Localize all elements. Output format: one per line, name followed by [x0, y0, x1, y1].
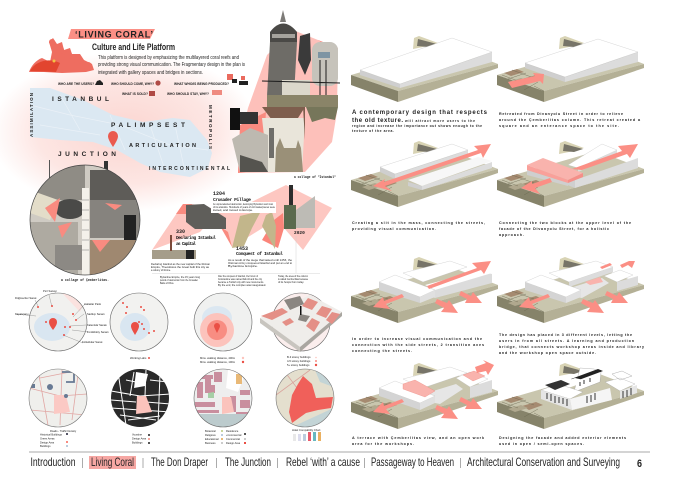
site map 5: traffic density [29, 369, 87, 427]
legend: figure ground: Voustine [132, 432, 143, 436]
text: diagram 5: In order to increase visual communication and the [352, 337, 482, 341]
timeline text: 330: Empire, Theodosius the Great built this city as [151, 266, 210, 269]
timeline notes: By the end, the complex was inaugurated. [218, 284, 266, 287]
text: diagram 1: region and increase the importance out shows enough to the [352, 124, 482, 128]
legend: land use: Residence [226, 429, 239, 433]
pink bridge block [527, 158, 583, 183]
arrow: axis [572, 144, 638, 170]
legend: traffic density: Historical Buildings [40, 432, 63, 436]
text: diagram 3 [352, 221, 485, 231]
site map 1: street labels: Koltuklular Sanat [82, 340, 103, 344]
legend: walking distance: Mins. walking distance, 100m [200, 360, 236, 364]
legend: color bars [292, 428, 321, 441]
text: diagram 1 [352, 110, 488, 133]
intro paragraph [98, 55, 245, 76]
diagram 4: connected blocks [497, 141, 644, 207]
text: diagram 8 [499, 436, 626, 446]
diagram 2: retreat [497, 36, 644, 102]
footer navigation: Rebel ‘with’ a cause [286, 455, 360, 469]
Galata tower [267, 10, 297, 96]
timeline text: 1204: Crusader Pillage [213, 197, 251, 203]
timeline notes: became a Turkish city with new monuments. [218, 281, 264, 284]
text: diagram 4: Connecting the two blocks at the upper level of the [499, 221, 631, 225]
text: diagram 2: around the Çemberlitas column. This retreat created a [499, 118, 641, 122]
legend: land use: Educational [205, 437, 219, 441]
arrow: street [521, 178, 552, 194]
text: diagram 6: users in from all streets. A learning and production [499, 339, 635, 343]
site map 1: street labels: Kalemkâr Sanatı [87, 323, 107, 327]
footer navigation: Passageway to Heaven [371, 455, 454, 469]
timeline photo: 330 [152, 235, 196, 259]
arrow: slit [373, 144, 491, 191]
site map 3: walking distance [194, 293, 252, 351]
text: diagram 2 [499, 112, 641, 128]
question row with icons: WHAT WHO/IS BEING PRODUCED? [174, 82, 229, 86]
map keywords: PALIMPSEST [111, 122, 185, 129]
map keywords [29, 93, 230, 172]
intro paragraph: This platform is designed by emphasizing the multilayered coral reefs and [98, 55, 239, 61]
timeline notes: After the conquest of Istanbul, the Forum of [218, 275, 258, 278]
text: diagram 6: bridge, that connects workshop areas inside and library [499, 345, 645, 349]
legend: building heights: 5+ storey buildings [287, 363, 310, 367]
legend: walking distance: Mins. walking distance, 400m [200, 356, 236, 360]
question row with icons: WHO SHOULD STAY, WHY? [167, 92, 209, 96]
text: diagram 6 [499, 333, 645, 355]
text: diagram 8: used in open / semi-open spaces. [499, 442, 584, 446]
legend: land use: +Commercial [226, 433, 242, 437]
timeline text: 330: as Capital [176, 241, 196, 247]
legend: working labs: Working Labs [130, 356, 147, 360]
timeline text: 1453: Ottoman Army conquered Istanbul and put an end to [228, 262, 293, 265]
diagram 3: slit [351, 141, 498, 207]
map keywords: METROPOLIS [208, 105, 213, 149]
arrow: long axis [427, 261, 491, 289]
diagram 8: final building [497, 363, 644, 429]
timeline text: 330 [151, 229, 216, 272]
timeline text: 2020: 2020 [294, 230, 305, 236]
question row with icons [58, 74, 248, 96]
question row with icons: WHAT IS SOLD? [122, 92, 148, 96]
text: diagram 7 [352, 436, 485, 446]
intro paragraph: integrated with gallery spaces and bridges in sections. [98, 70, 203, 76]
text: diagram 1: the old texture. [352, 118, 403, 124]
arrow: entrance [508, 73, 544, 88]
timeline notes: Today, the area of the column [278, 275, 309, 278]
timeline text: 1453 [228, 246, 293, 268]
text: diagram 8: Designing the facade and added exterior elements [499, 436, 626, 440]
text: diagram 4: approach. [499, 233, 524, 237]
timeline maps: 1453 [232, 211, 276, 249]
text: diagram 5 [352, 337, 484, 353]
text: diagram 1: A contemporary design that respects [352, 110, 488, 116]
text: diagram 7: area for the workshops. [352, 442, 414, 446]
text: diagram 7: A terrace with Çemberlitas view, and an open work [352, 436, 485, 440]
collage of Cemberlitas [30, 160, 140, 275]
text: diagram 5: connecting the streets. [352, 349, 412, 353]
footer navigation [30, 455, 620, 469]
timeline text: 1204: An unprecedented destruction, destroying Byzantium and most [213, 203, 273, 206]
site map 1: street labels: Düğmeciler Sanat [15, 296, 37, 300]
timeline notes: period of destruction from the Crusader [160, 279, 198, 282]
historic district map [276, 368, 334, 428]
text: diagram 3: Creating a slit in the mass, connecting the streets, [352, 221, 485, 225]
legend: building heights [287, 355, 317, 367]
legend: figure ground [132, 432, 150, 444]
timeline notes: Byzantine Empire, the 15 years long [160, 276, 201, 279]
page number: 6 [637, 458, 642, 470]
timeline text: 1204 [211, 191, 276, 213]
timeline notes: of its hoops from today. [278, 281, 304, 284]
text: diagram 6: and the workshop open space outside. [499, 351, 596, 355]
legend: color bars: Hotel Compability Chart [292, 428, 321, 432]
timeline text: 330: a colony of Rome. [151, 269, 171, 272]
arrow: bottom [435, 299, 458, 313]
legend: figure ground: Buildings [132, 440, 143, 444]
timeline text: 1453: As a result of the siege that lasted until 1453, the [228, 259, 293, 262]
legend: land use: Religious [205, 433, 216, 437]
timeline text: 1453: Conquest of Istanbul [236, 251, 283, 257]
legend: building heights: 4-5 storey buildings [287, 359, 311, 363]
text: diagram 2: square and an enterance space to the site. [499, 124, 619, 128]
legend: land use [205, 429, 246, 445]
arrow: right [459, 291, 482, 303]
legend: land use: Commercial [226, 437, 240, 441]
legend: traffic density [40, 429, 77, 448]
legend: land use: Business [205, 441, 216, 445]
legend: figure ground: Design Area [132, 436, 147, 440]
timeline photo: 1204 [186, 204, 226, 229]
background glow [0, 52, 260, 212]
timeline photo: 2020 [284, 185, 315, 229]
title: Living Coral: ‘LIVING CORAL’ [75, 30, 153, 40]
map keywords: JUNCTION [58, 151, 116, 158]
legend: traffic density: Roads - Traffic Density [50, 429, 77, 433]
collage of Istanbul [230, 10, 340, 173]
diagram 7: terrace [351, 360, 498, 429]
text: diagram 6: The design has placed in 3 different levels, letting the [499, 333, 632, 337]
legend: traffic density: Design Area [40, 440, 55, 444]
subtitle: Culture and Life Platform [92, 42, 175, 52]
arrows: terrace [373, 360, 494, 419]
footer navigation: The Junction [225, 455, 271, 469]
timeline notes: is called Cemberlitas because [278, 278, 309, 281]
footer navigation: The Don Draper [151, 455, 208, 469]
map keywords: ASSIMILATION [29, 93, 34, 137]
timeline text: 1204: looted, and moved to Europe. [213, 209, 253, 212]
timeline [151, 185, 332, 287]
site model isometric [260, 293, 342, 352]
footer navigation: Introduction [30, 455, 76, 469]
map keywords: ISTANBUL [52, 96, 109, 103]
timeline text: 330: Declaring Istanbul [176, 235, 216, 241]
timeline text: 1204: 1204 [213, 191, 225, 197]
pink terraces [403, 371, 485, 397]
timeline notes: Battle of Rhos. [160, 282, 174, 285]
legend: building heights: B-3 storey buildings [287, 355, 311, 359]
timeline text: 330: 330 [176, 229, 185, 235]
map pin [108, 131, 118, 147]
legend: working labs [130, 356, 150, 360]
text: diagram 1: will attract more users to the [404, 119, 475, 123]
text: diagram 2: Retreated from Divanyolu Street in order to relieve [499, 112, 623, 116]
caption: collage of Istanbul: a collage of "Istanbul" [294, 175, 336, 180]
timeline text: 1453: Byzantine Empire. [228, 265, 259, 268]
diagram 5: side streets [351, 257, 498, 323]
site map 1: street labels: Sadıkçı Sanatı [87, 312, 105, 316]
text: diagram 4: facade of the Divanyolu Street, for a holistic [499, 227, 609, 231]
footer rule [29, 452, 650, 453]
legend: traffic density: Green Areas [40, 436, 55, 440]
timeline text: 1204: of its artworks. Hundreds of years of old masterpieces were [213, 206, 276, 209]
timeline notes [160, 275, 309, 287]
figure ground map [111, 369, 170, 427]
legend: land use: Design Area [226, 441, 241, 445]
question row with icons: WHO SHOULD COME, WHY? [111, 82, 154, 86]
map keywords: INTERCONTINENTAL [149, 166, 230, 172]
arrows: streets [519, 261, 635, 313]
timeline notes: Constantine was named Atik Ali and the city [218, 278, 263, 281]
text: diagram 5: connection with the side streets, 2 transition axes [352, 343, 484, 347]
site map 1: street labels: Fındıklıköy Sanatı [87, 330, 109, 334]
legend: traffic density: Buildings [40, 444, 51, 448]
text: diagram 1: texture of the area. [352, 129, 394, 133]
site map 1: street labels [15, 289, 109, 351]
intro paragraph: providing strong visual communication. The Fragmentary design in the plan is [98, 62, 245, 68]
text: diagram 4 [499, 221, 631, 237]
map of Istanbul [30, 88, 212, 177]
site map 1: street labels: Hattatlar Parkı [84, 302, 101, 306]
map keywords: ARTICULATION [129, 143, 196, 149]
footer navigation: Living Coral [91, 455, 134, 469]
diagram 6: levels [497, 257, 644, 323]
text: diagram 3: providing visual communication. [352, 227, 436, 231]
land use map [194, 369, 252, 427]
question row with icons: WHO ARE THE USERS? [58, 82, 94, 86]
icon: coral [29, 38, 94, 73]
site map 1: street labels: Pırıl Sanayi [43, 289, 57, 293]
site map 1: street labels: Kapalıçarşı [15, 312, 29, 316]
legend: land use: Botanical [205, 429, 216, 433]
arrow: left [373, 294, 404, 309]
site map 2: working labs [110, 293, 168, 351]
diagram 1: massing [351, 36, 498, 102]
caption: collage of Cemberlitas: a collage of Çemberlitas. [61, 278, 109, 283]
timeline text: 1453: 1453 [236, 246, 248, 252]
legend: walking distance [200, 356, 244, 364]
timeline text: 330: Declaring Istanbul as the new capital of the Roman [151, 263, 211, 266]
